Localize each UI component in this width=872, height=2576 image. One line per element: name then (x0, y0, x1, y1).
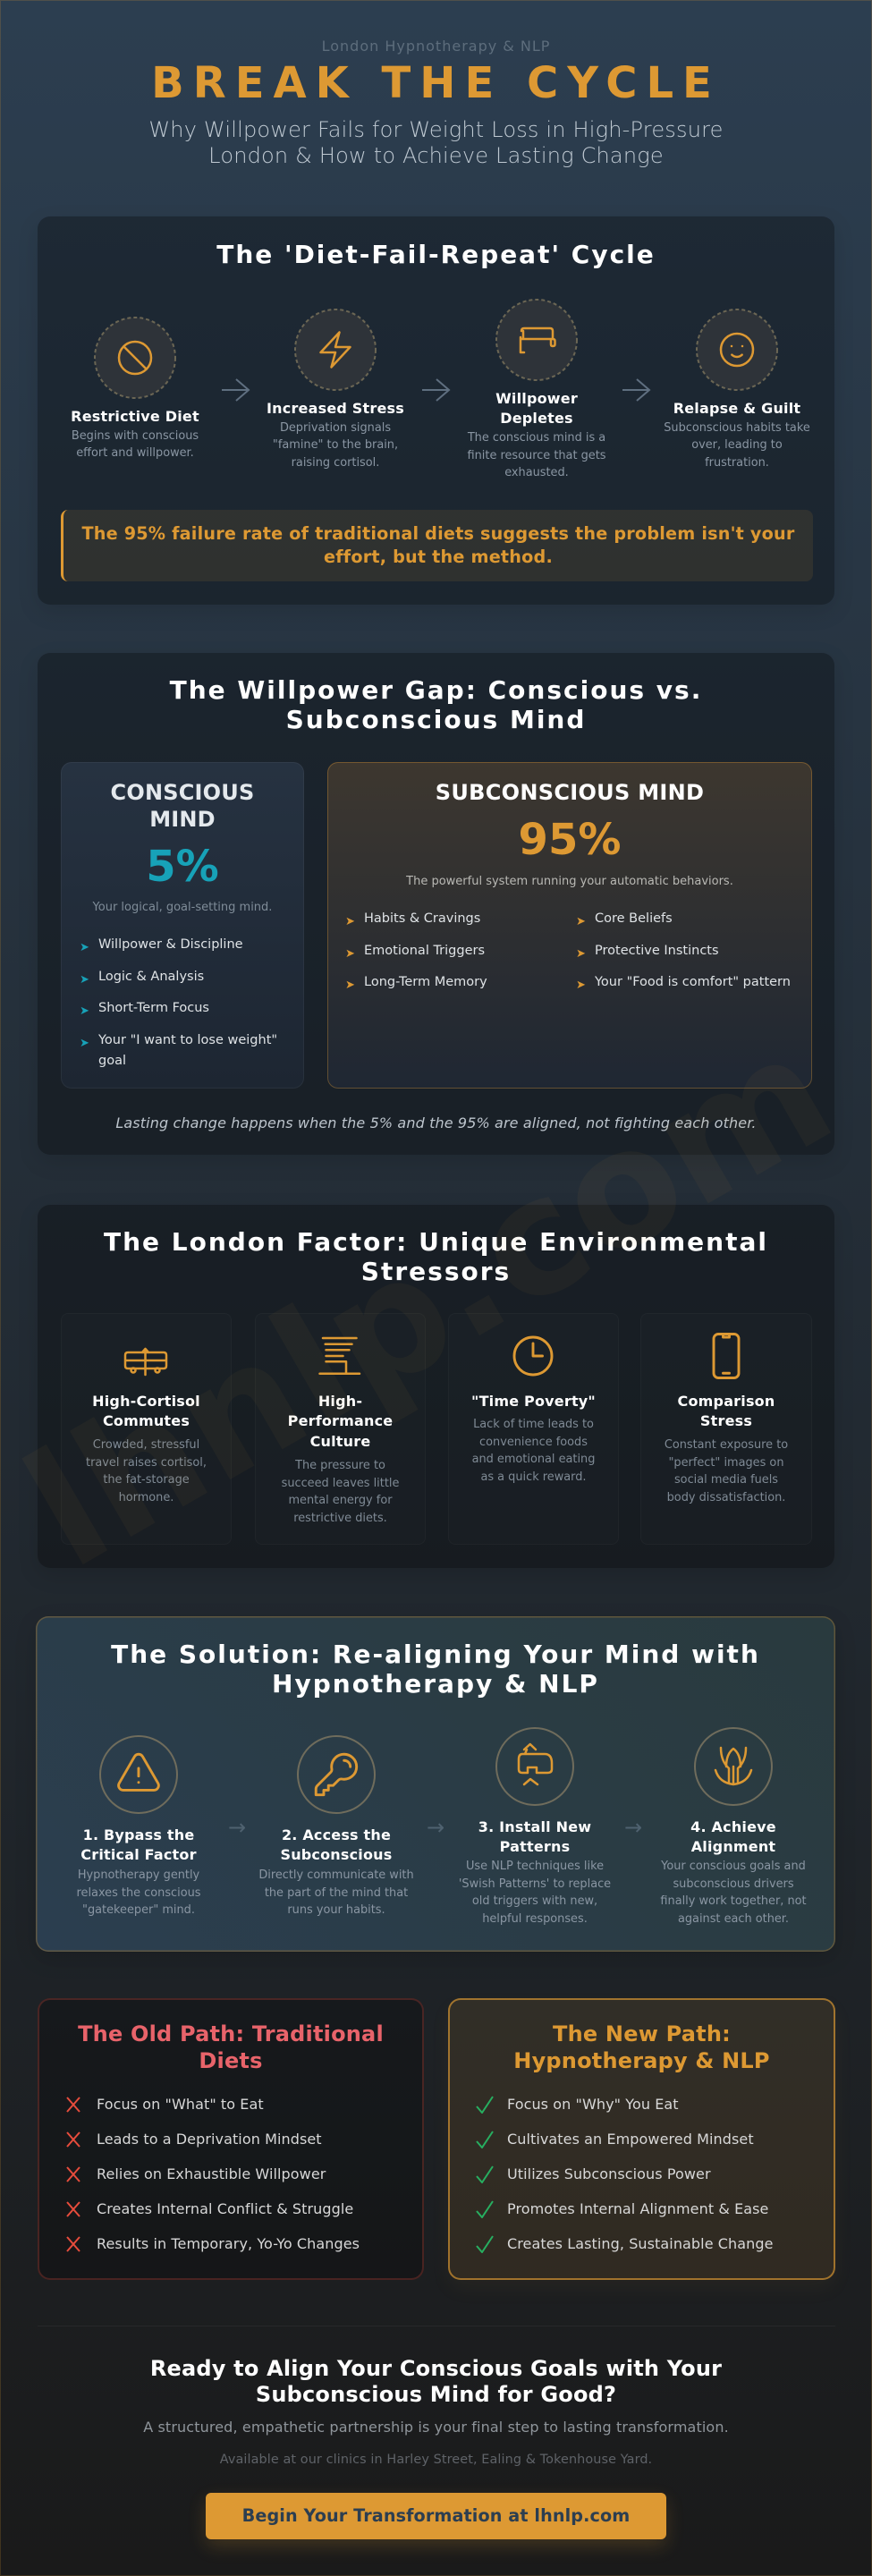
step text (467, 431, 605, 479)
card: performance culture (255, 1313, 426, 1545)
panel: london factor (38, 1205, 834, 1568)
card text: hormone. (119, 1490, 174, 1504)
step text: Your conscious goals and (661, 1860, 806, 1873)
step text (664, 420, 810, 469)
icon: lotus (694, 1727, 773, 1806)
tagline: Your logical, goal-setting mind. (93, 901, 272, 914)
card text (665, 1438, 788, 1504)
tagline: The powerful system running your automatic behaviors. (406, 875, 733, 888)
card text: as a quick reward. (480, 1470, 587, 1483)
card title (288, 1393, 393, 1450)
subtitle (148, 117, 724, 168)
card heading: SUBCONSCIOUS MIND (436, 780, 704, 805)
card title: Stress (700, 1412, 752, 1429)
step title: Willpower (495, 390, 578, 407)
list item (65, 2164, 423, 2185)
arrow (222, 378, 250, 402)
list: ➤ (576, 947, 586, 961)
heading: Hypnotherapy & NLP (272, 1669, 599, 1699)
heading: The Willpower Gap: Conscious vs. (170, 674, 702, 705)
step title: Increased Stress (267, 400, 404, 417)
card text (282, 1459, 399, 1524)
card text: Crowded, stressful (93, 1438, 199, 1452)
step text: Hypnotherapy gently (78, 1868, 199, 1882)
step text: raising cortisol. (292, 456, 379, 469)
step text: frustration. (705, 456, 769, 469)
list: Emotional Triggers (364, 943, 485, 957)
list: Willpower & Discipline (98, 937, 243, 952)
list: ➤ (345, 947, 355, 961)
step title: 2. Access the (282, 1826, 391, 1843)
list item (65, 2129, 423, 2150)
arrow (622, 378, 651, 402)
card title: Comparison (678, 1393, 775, 1410)
heading: Stressors (361, 1257, 511, 1286)
card text: body dissatisfaction. (667, 1490, 785, 1504)
step title: Alignment (691, 1838, 775, 1855)
list: Your "I want to lose weight" (98, 1032, 277, 1046)
card text: succeed leaves little (282, 1476, 399, 1490)
step text: over, leading to (691, 438, 783, 452)
card text: Constant exposure to (665, 1438, 788, 1452)
card title (678, 1393, 775, 1429)
heading (170, 674, 702, 734)
list: Core Beliefs (595, 911, 673, 925)
footer heading (0, 2356, 872, 2408)
step text: finally work together, not (660, 1894, 807, 1908)
step text: "famine" to the brain, (273, 438, 398, 452)
step title (247, 1826, 426, 1866)
heading: The London Factor: Unique Environmental (104, 1227, 768, 1256)
callout: The 95% failure rate of traditional diets suggests the problem isn't your (81, 523, 795, 544)
card: comparison stress (640, 1313, 812, 1545)
card text: convenience foods (479, 1435, 588, 1449)
list item (476, 2199, 834, 2220)
icon: building (318, 1336, 361, 1375)
arrow (422, 378, 451, 402)
step title (495, 390, 578, 427)
card title: Performance (288, 1412, 393, 1429)
step text: against each other. (678, 1912, 789, 1925)
list item (476, 2233, 834, 2255)
step text: the part of the mind that (265, 1885, 408, 1900)
heading: Subconscious Mind (286, 705, 586, 734)
list item: Leads to a Deprivation Mindset (97, 2131, 322, 2148)
list item: Focus on "Why" You Eat (507, 2096, 679, 2113)
heading: Hypnotherapy & NLP (513, 2048, 770, 2073)
heading (104, 1227, 768, 1286)
card text: mental energy for (288, 1494, 393, 1507)
card text: "perfect" images on (668, 1456, 783, 1469)
5 percent: 5% (146, 842, 219, 892)
card text: restrictive diets. (293, 1512, 387, 1524)
list: Your "Food is comfort" pattern (595, 975, 791, 989)
icon: clock (513, 1336, 553, 1376)
list item (476, 2129, 834, 2150)
list item (476, 2094, 834, 2115)
step title: Subconscious (280, 1846, 393, 1863)
icon: no symbol (94, 317, 176, 399)
step title: Restrictive Diet (71, 408, 199, 425)
step title: 4. Achieve (690, 1818, 776, 1835)
step title (445, 1818, 624, 1858)
step text: Begins with conscious (72, 429, 199, 442)
icon: bench (495, 299, 578, 381)
panel: willpower gap (38, 653, 834, 1155)
card text: and emotional eating (472, 1453, 595, 1466)
arrow: → (228, 1815, 246, 1840)
subtitle: Why Willpower Fails for Weight Loss in High-Pressure (148, 117, 724, 142)
card heading (111, 780, 254, 832)
step title: Patterns (500, 1838, 570, 1855)
list: Long-Term Memory (364, 975, 487, 989)
step text: "gatekeeper" mind. (82, 1903, 195, 1917)
card text (472, 1418, 595, 1483)
list: ➤ (576, 915, 586, 928)
card: commutes (61, 1313, 232, 1545)
card title: High- (318, 1393, 362, 1410)
step text: Subconscious habits take (664, 420, 810, 435)
list: Short-Term Focus (98, 1000, 209, 1014)
list: goal (98, 1054, 126, 1068)
list: ➤ (576, 979, 586, 992)
list item: Promotes Internal Alignment & Ease (507, 2200, 769, 2217)
card text: Lack of time leads to (473, 1418, 594, 1431)
step text: 'Swish Patterns' to replace (459, 1877, 611, 1891)
step: relapse and guilt (664, 309, 810, 469)
step text: old triggers with new, (472, 1894, 597, 1908)
step text: subconscious drivers (673, 1877, 794, 1891)
step 1 (77, 1735, 200, 1917)
list item: Creates Lasting, Sustainable Change (507, 2235, 774, 2252)
icon: bolt (294, 309, 377, 391)
card: time poverty (448, 1313, 619, 1545)
card heading: CONSCIOUS (111, 780, 254, 805)
heading (448, 2021, 835, 2074)
footer call to action (0, 2352, 872, 2558)
step text: The conscious mind is a (468, 431, 605, 445)
list item: Results in Temporary, Yo-Yo Changes (97, 2235, 360, 2252)
heading (38, 2021, 424, 2074)
icon: warning (99, 1735, 178, 1814)
card text: travel raises cortisol, (86, 1456, 207, 1469)
list item: Cultivates an Empowered Mindset (507, 2131, 754, 2148)
icon: phone (712, 1333, 741, 1379)
card title: Culture (310, 1433, 370, 1450)
header (148, 38, 724, 168)
panel: old path (38, 1998, 424, 2280)
step title: 1. Bypass the (83, 1826, 194, 1843)
card: conscious mind (61, 762, 304, 1089)
list item (65, 2233, 423, 2255)
card text (86, 1438, 207, 1504)
card title: High-Cortisol (92, 1393, 200, 1410)
arrow: → (624, 1815, 642, 1840)
callout (61, 510, 813, 581)
step text: Deprivation signals (280, 420, 391, 435)
list item: Relies on Exhaustible Willpower (97, 2165, 326, 2182)
step text (72, 429, 199, 460)
step: restrictive diet (71, 317, 199, 460)
footer heading: Subconscious Mind for Good? (256, 2382, 616, 2407)
card heading: MIND (149, 807, 216, 832)
card text: social media fuels (674, 1473, 778, 1487)
arrow: → (427, 1815, 444, 1840)
list: Protective Instincts (595, 943, 719, 957)
eyebrow: London Hypnotherapy & NLP (322, 38, 550, 55)
icon: key (297, 1735, 376, 1814)
list: ➤ (345, 915, 355, 928)
list item (65, 2094, 423, 2115)
card text: The pressure to (295, 1459, 385, 1472)
panel: diet-fail-repeat cycle (38, 216, 834, 605)
title: BREAK THE CYCLE (151, 58, 721, 108)
step text (77, 1868, 200, 1917)
list (80, 937, 277, 1068)
heading: Diets (199, 2048, 263, 2073)
heading (111, 1639, 760, 1699)
step 3 (445, 1727, 624, 1906)
step title: Critical Factor (80, 1846, 197, 1863)
step text: effort and willpower. (76, 446, 194, 460)
list: ➤ (80, 1037, 89, 1050)
95 percent: 95% (519, 815, 621, 865)
subtitle: London & How to Achieve Lasting Change (208, 143, 664, 168)
heading: The Old Path: Traditional (78, 2021, 384, 2046)
step text (247, 1867, 426, 1919)
panel: new path (448, 1998, 835, 2280)
list item (476, 2164, 834, 2185)
step title: 3. Install New (478, 1818, 591, 1835)
icon: swish pattern (495, 1727, 574, 1806)
step text: finite resource that gets (468, 449, 605, 462)
list: ➤ (345, 979, 355, 992)
card title: "Time Poverty" (471, 1393, 596, 1410)
step: increased stress (267, 309, 404, 469)
panel: the solution (36, 1616, 835, 1952)
button: Begin Your Transformation at lhnlp.com (242, 2505, 630, 2526)
heading: The 'Diet-Fail-Repeat' Cycle (216, 240, 656, 269)
step title: Depletes (500, 410, 573, 427)
footer heading: Ready to Align Your Conscious Goals with Your (150, 2356, 722, 2381)
card title: Commutes (103, 1412, 190, 1429)
list: ➤ (80, 941, 89, 954)
step 2 (258, 1735, 414, 1917)
card: subconscious mind (327, 762, 812, 1089)
icon: train (123, 1347, 168, 1376)
heading: The New Path: (553, 2021, 731, 2046)
step: willpower depletes (467, 299, 605, 479)
step 4 (644, 1727, 823, 1906)
list item: Focus on "What" to Eat (97, 2096, 264, 2113)
watermark: lhnlp.com (0, 997, 861, 1605)
list item: Creates Internal Conflict & Struggle (97, 2200, 353, 2217)
button (206, 2493, 666, 2539)
step text (273, 420, 398, 469)
callout: effort, but the method. (324, 546, 553, 567)
step title (80, 1826, 197, 1863)
clinic locations: Available at our clinics in Harley Street, Ealing & Tokenhouse Yard. (220, 2453, 652, 2467)
list: Habits & Cravings (364, 911, 480, 925)
list item: Utilizes Subconscious Power (507, 2165, 711, 2182)
step text: runs your habits. (287, 1903, 385, 1917)
step text: relaxes the conscious (77, 1885, 200, 1900)
list item (65, 2199, 423, 2220)
icon: smile (696, 309, 778, 391)
step text: Use NLP techniques like (466, 1860, 604, 1873)
list: Logic & Analysis (98, 970, 204, 984)
step text: helpful responses. (482, 1912, 588, 1925)
step title (644, 1818, 823, 1858)
note: Lasting change happens when the 5% and the 95% are aligned, not fighting each other. (115, 1114, 757, 1131)
list: ➤ (80, 1004, 89, 1018)
step text (445, 1858, 624, 1928)
heading: The Solution: Re-aligning Your Mind with (111, 1639, 760, 1669)
step text: Directly communicate with (258, 1868, 414, 1882)
step text: exhausted. (504, 466, 569, 479)
list: ➤ (80, 973, 89, 987)
footer text: A structured, empathetic partnership is your final step to lasting transformation. (143, 2419, 729, 2436)
list (345, 911, 791, 992)
step text (644, 1858, 823, 1928)
card title (92, 1393, 200, 1429)
step title: Relapse & Guilt (673, 400, 800, 417)
card text: the fat-storage (103, 1473, 190, 1487)
